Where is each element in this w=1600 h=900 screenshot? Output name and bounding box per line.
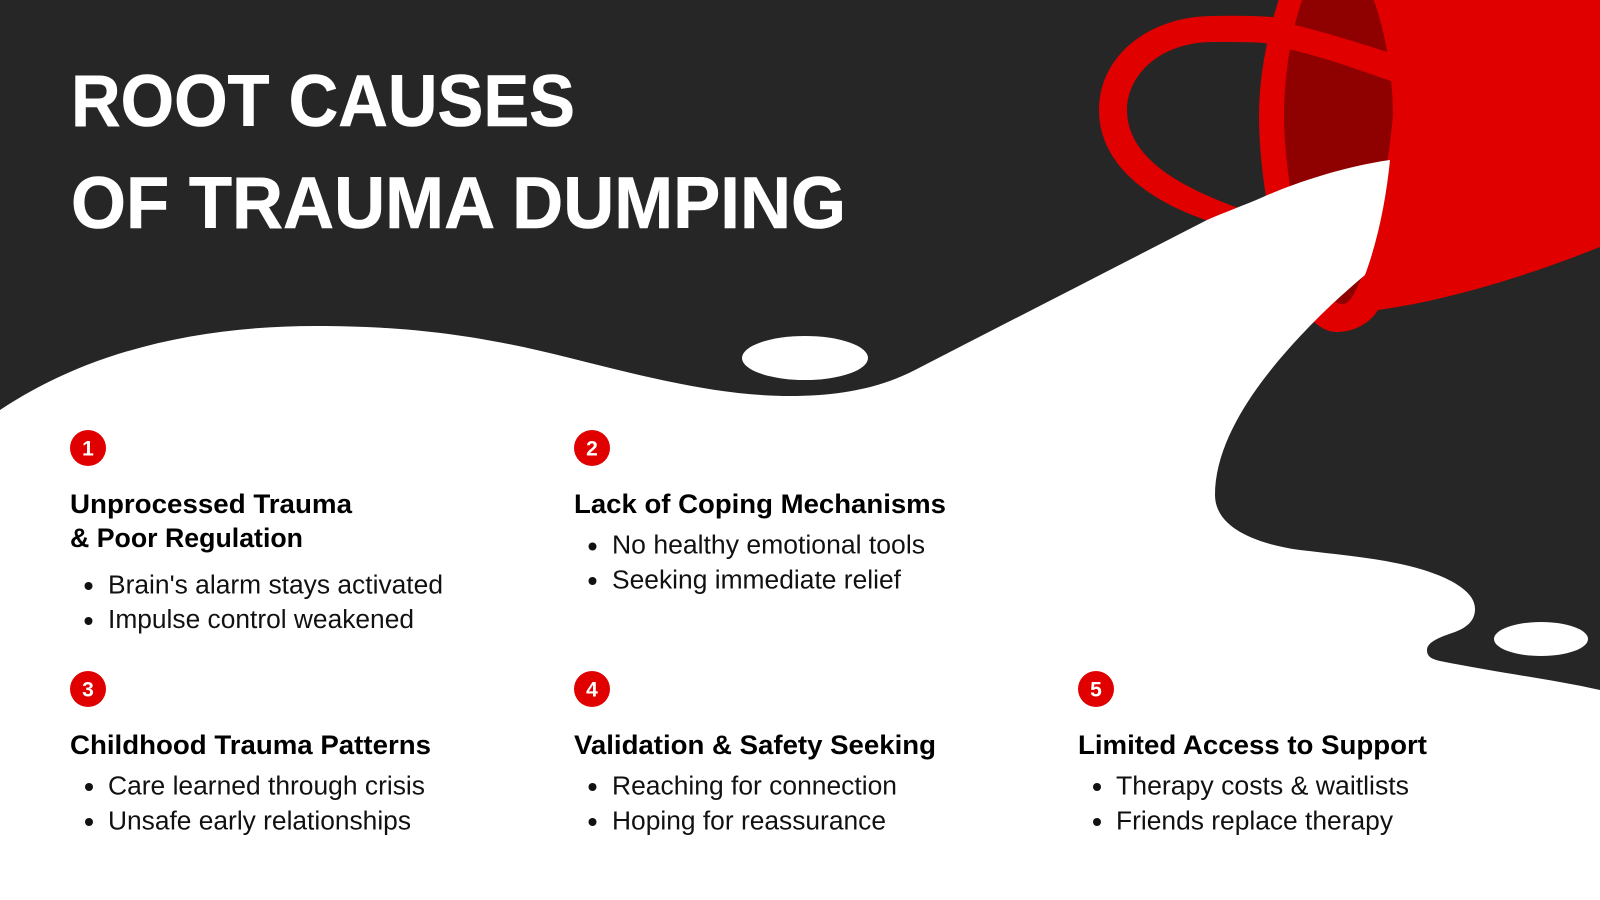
title: OF TRAUMA DUMPING	[71, 163, 846, 244]
bullet list: cause 3: Care learned through crisis	[108, 772, 425, 800]
heading: cause 4: Validation & Safety Seeking	[574, 730, 936, 760]
bullet list: cause 1	[84, 572, 443, 634]
bullet list: cause 4: Hoping for reassurance	[612, 808, 886, 836]
number badge 5	[1078, 671, 1114, 707]
title: ROOT CAUSES	[71, 61, 575, 142]
bullet list: cause 4	[588, 772, 897, 836]
bullet list: cause 2: Seeking immediate relief	[612, 566, 902, 594]
number badge 5: 5	[1090, 678, 1102, 702]
panel: cause 3	[70, 671, 431, 836]
bullet list: cause 1: Impulse control weakened	[108, 606, 414, 634]
icon: tipped red cup	[1099, 0, 1600, 332]
bullet list: cause 1: Brain's alarm stays activated	[108, 572, 443, 600]
bullet list: cause 3	[85, 772, 425, 836]
panel: cause 1	[70, 430, 443, 634]
bullet list: cause 5	[1093, 772, 1409, 836]
title	[71, 61, 846, 244]
panel: cause 4	[574, 671, 936, 836]
number badge 3	[70, 671, 106, 707]
number badge 4	[574, 671, 610, 707]
bullet list: cause 2: No healthy emotional tools	[612, 532, 925, 560]
number badge 1: 1	[82, 438, 94, 460]
bullet list: cause 2	[588, 532, 925, 594]
bullet list: cause 5: Friends replace therapy	[1116, 808, 1393, 836]
number badge 1	[70, 430, 106, 466]
number badge 4: 4	[586, 678, 598, 702]
bullet list: cause 4: Reaching for connection	[612, 772, 897, 800]
heading: cause 3: Childhood Trauma Patterns	[70, 730, 431, 760]
number badge 2: 2	[586, 438, 598, 460]
droplet: upper white splash	[742, 336, 868, 380]
number badge 2	[574, 430, 610, 466]
number badge 3: 3	[82, 678, 94, 702]
bullet list: cause 3: Unsafe early relationships	[108, 808, 411, 836]
heading: cause 5: Limited Access to Support	[1078, 730, 1427, 760]
bullet list: cause 5: Therapy costs & waitlists	[1116, 772, 1409, 800]
droplet: lower white splash	[1494, 622, 1588, 656]
heading: cause 1: Unprocessed Trauma	[70, 489, 353, 519]
heading: cause 1: & Poor Regulation	[70, 523, 303, 553]
panel: cause 2	[574, 430, 946, 594]
heading: cause 1	[70, 489, 353, 553]
panel: cause 5	[1078, 671, 1427, 836]
heading: cause 2: Lack of Coping Mechanisms	[574, 489, 946, 519]
